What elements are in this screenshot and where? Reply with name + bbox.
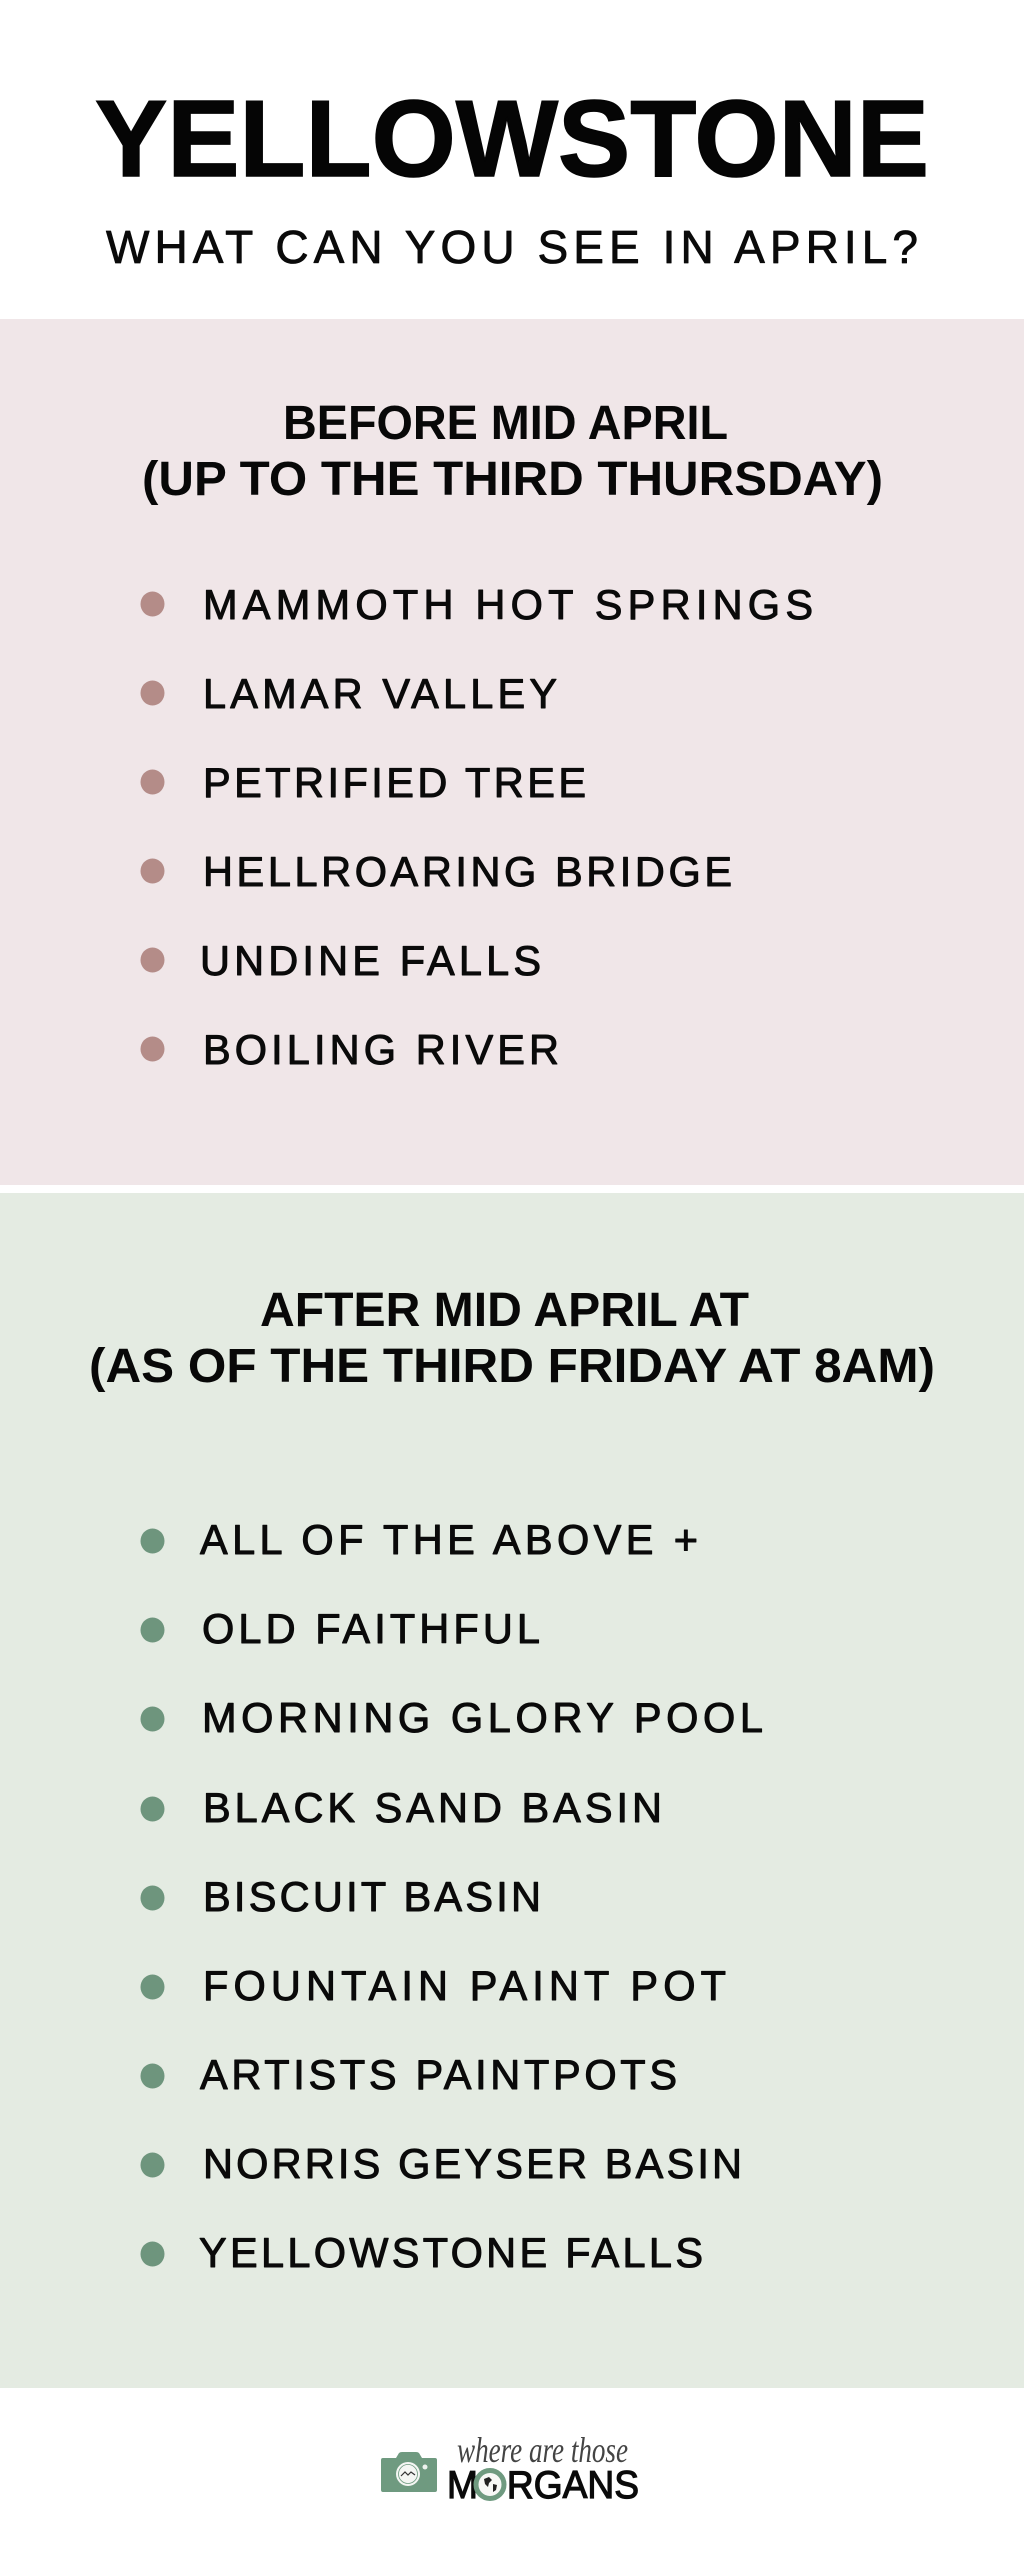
list item: Biscuit Basin: BISCUIT BASIN	[203, 1873, 541, 1920]
heading: after mid April: (AS OF THE THIRD FRIDAY AT 8AM)	[89, 1340, 935, 1393]
panel: before mid April	[0, 319, 1024, 1185]
title: YELLOWSTONE	[95, 78, 929, 200]
heading: before mid April: (UP TO THE THIRD THURSDAY)	[142, 453, 883, 506]
list: places open after mid April	[140, 1516, 763, 2276]
panel: after mid April	[0, 1193, 1024, 2388]
list item: Norris Geyser Basin: NORRIS GEYSER BASIN	[203, 2140, 742, 2187]
list item: Morning Glory Pool: MORNING GLORY POOL	[202, 1694, 763, 1741]
panel background: green	[0, 1193, 1024, 2388]
list: places open before mid April	[140, 581, 813, 1073]
list item: Undine Falls: UNDINE FALLS	[200, 937, 541, 984]
list item: All of the above: ALL OF THE ABOVE +	[200, 1516, 698, 1563]
list item: Boiling River: BOILING RIVER	[203, 1026, 559, 1073]
heading: after mid April: AFTER MID APRIL AT	[260, 1284, 749, 1337]
panel background: pink	[0, 319, 1024, 1185]
heading: before mid April	[142, 397, 883, 506]
list item: Petrified Tree: PETRIFIED TREE	[203, 759, 586, 806]
list item: Yellowstone Falls: YELLOWSTONE FALLS	[199, 2229, 703, 2276]
list item: Hellroaring Bridge: HELLROARING BRIDGE	[203, 848, 732, 895]
icon: camera	[381, 2452, 437, 2492]
list item: Lamar Valley: LAMAR VALLEY	[203, 670, 557, 717]
logo script text: where are those	[457, 2430, 628, 2470]
list item: Mammoth Hot Springs: MAMMOTH HOT SPRINGS	[203, 581, 813, 628]
heading: after mid April	[89, 1284, 935, 1393]
icon: globe in O	[476, 2470, 504, 2498]
list item: Artists Paintpots: ARTISTS PAINTPOTS	[200, 2051, 677, 2098]
heading: before mid April: BEFORE MID APRIL	[283, 397, 728, 450]
logo wordmark: MORGANS	[447, 2464, 639, 2507]
list item: Black Sand Basin: BLACK SAND BASIN	[203, 1784, 662, 1831]
list item: Fountain Paint Pot: FOUNTAIN PAINT POT	[203, 1962, 726, 2009]
logo: where are those Morgans	[381, 2430, 639, 2507]
list item: Old Faithful: OLD FAITHFUL	[202, 1605, 540, 1652]
subtitle: WHAT CAN YOU SEE IN APRIL?	[106, 221, 918, 273]
